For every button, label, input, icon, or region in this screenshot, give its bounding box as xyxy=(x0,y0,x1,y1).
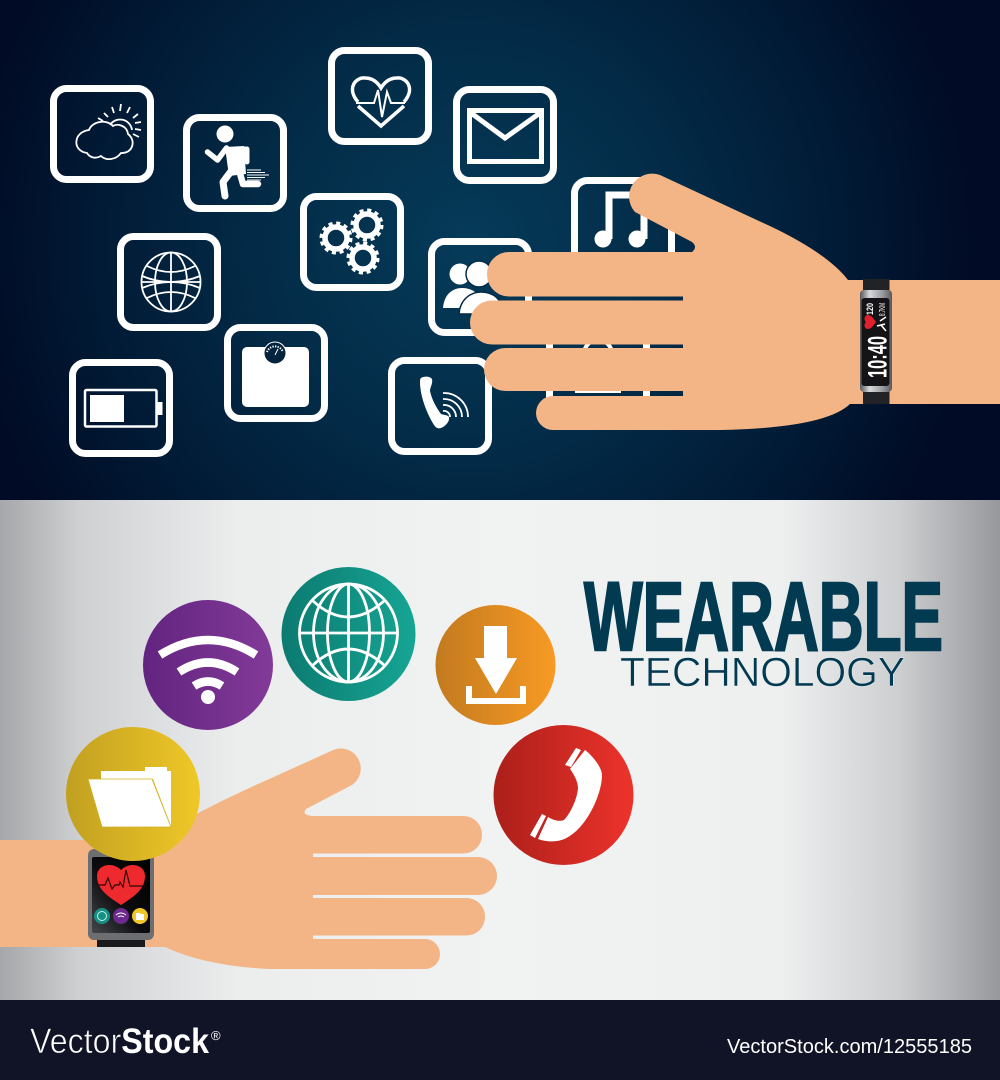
smartwatch on lower wrist xyxy=(88,849,154,947)
icon: globe xyxy=(120,236,218,328)
fitness band on top wrist xyxy=(860,279,892,404)
icon: weighing scale xyxy=(228,328,324,418)
icon: runner xyxy=(186,118,284,208)
icon: gears xyxy=(304,196,400,288)
icon: envelope xyxy=(456,90,554,180)
footer image id: VectorStock.com/12555185 xyxy=(727,1036,972,1058)
watch app dots xyxy=(94,908,148,924)
band heart xyxy=(865,315,876,329)
red phone circle xyxy=(494,725,634,865)
icon: hidden app behind fingers xyxy=(550,324,646,414)
icon: music notes xyxy=(574,180,672,272)
icon: phone with signal xyxy=(392,360,488,452)
icon: people group xyxy=(432,242,528,332)
band runner glyph xyxy=(877,317,886,331)
icon: weather xyxy=(54,88,150,180)
panel: light bottom background xyxy=(0,500,1000,1000)
yellow folder circle xyxy=(66,727,200,861)
band time: 10:40 xyxy=(862,336,892,378)
panel: dark top background xyxy=(0,0,1000,500)
top hand with fingers xyxy=(470,174,1000,430)
purple wifi circle xyxy=(143,600,273,730)
orange download circle xyxy=(436,605,556,725)
band steps: 120 xyxy=(865,303,876,315)
teal globe circle xyxy=(282,567,416,701)
subtitle: technology: TECHNOLOGY xyxy=(620,649,905,695)
footer registered mark: ® xyxy=(211,1028,221,1043)
band distance: 8.7KM xyxy=(878,303,887,316)
icon: battery xyxy=(72,362,170,454)
footer logo: VectorStock xyxy=(30,1022,209,1061)
watch heart xyxy=(97,865,145,905)
icon: heart with pulse xyxy=(332,50,428,142)
panel: footer bar xyxy=(0,1000,1000,1080)
bottom hand with fingers xyxy=(0,748,497,969)
